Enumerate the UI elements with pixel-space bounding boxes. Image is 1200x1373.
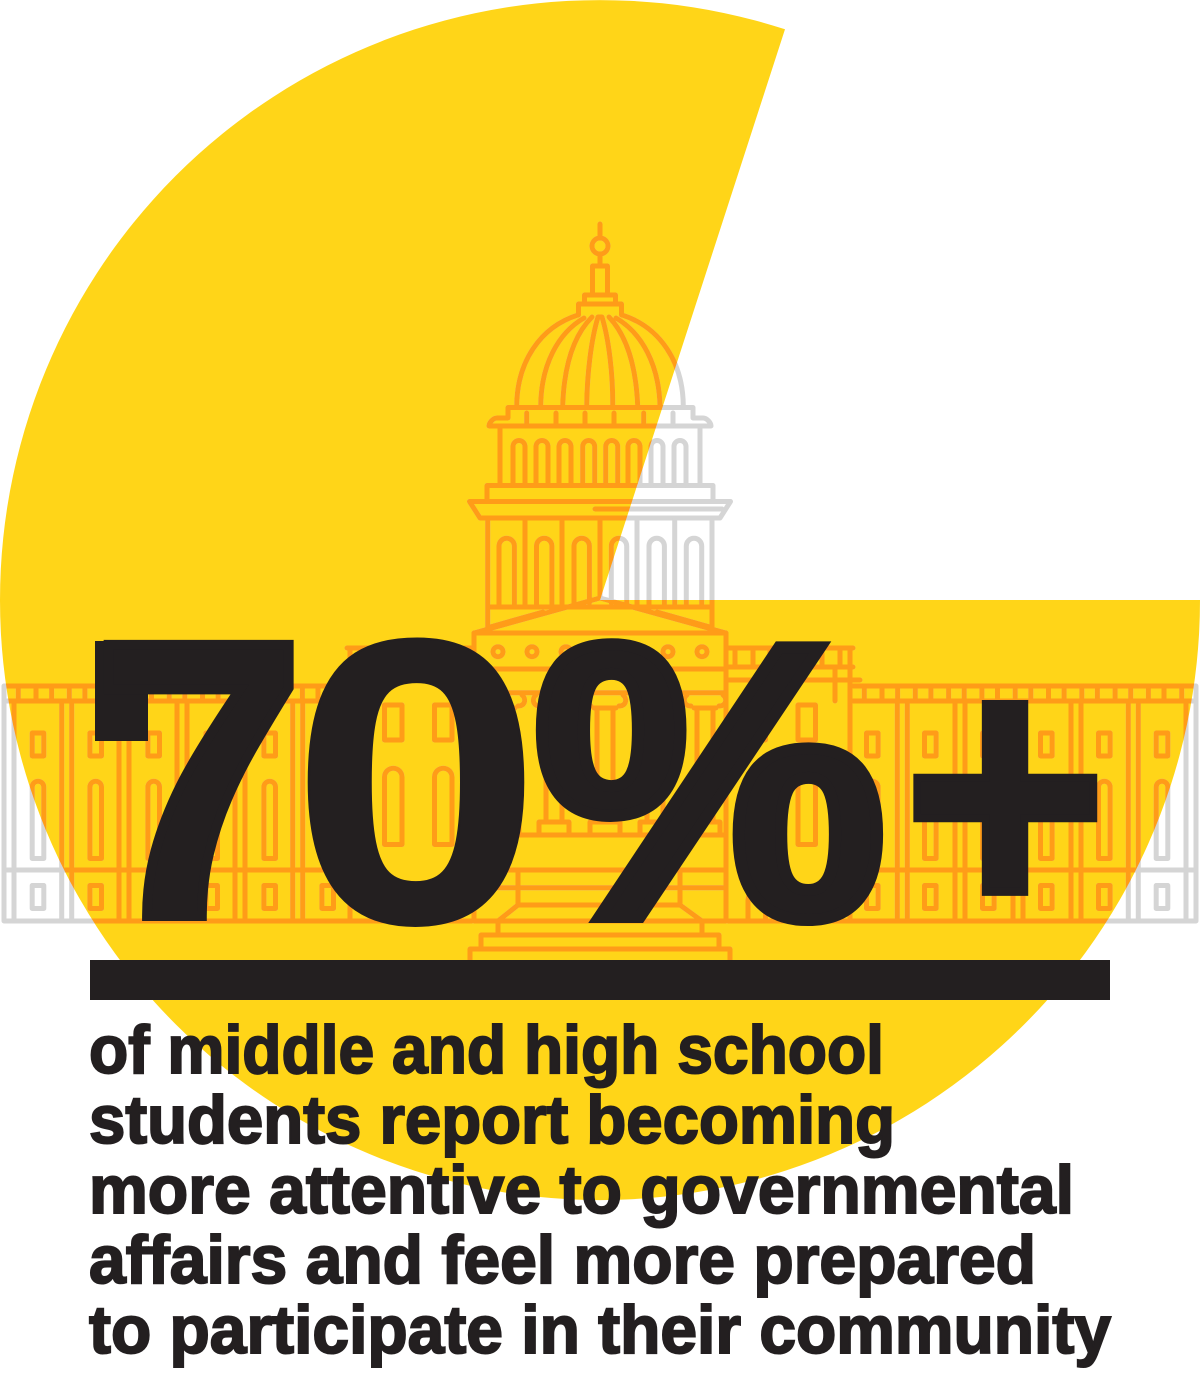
illustration: capitol building <box>4 224 1196 960</box>
caption text: to participate in their community <box>89 1292 1111 1368</box>
caption text: of middle and high school <box>89 1012 884 1088</box>
big number: 70%+: 7 <box>92 561 306 1000</box>
big number: 70%+: 0 <box>291 555 542 1008</box>
caption text: students report becoming <box>89 1082 895 1158</box>
divider bar <box>90 960 1110 1000</box>
big number: 70%+ <box>92 555 1108 1008</box>
caption text: affairs and feel more prepared <box>89 1222 1036 1298</box>
big number: 70%+: + <box>902 587 1108 1000</box>
big number: 70%+: % <box>532 563 888 1000</box>
caption text <box>89 1012 1111 1368</box>
caption text: more attentive to governmental <box>89 1152 1074 1228</box>
